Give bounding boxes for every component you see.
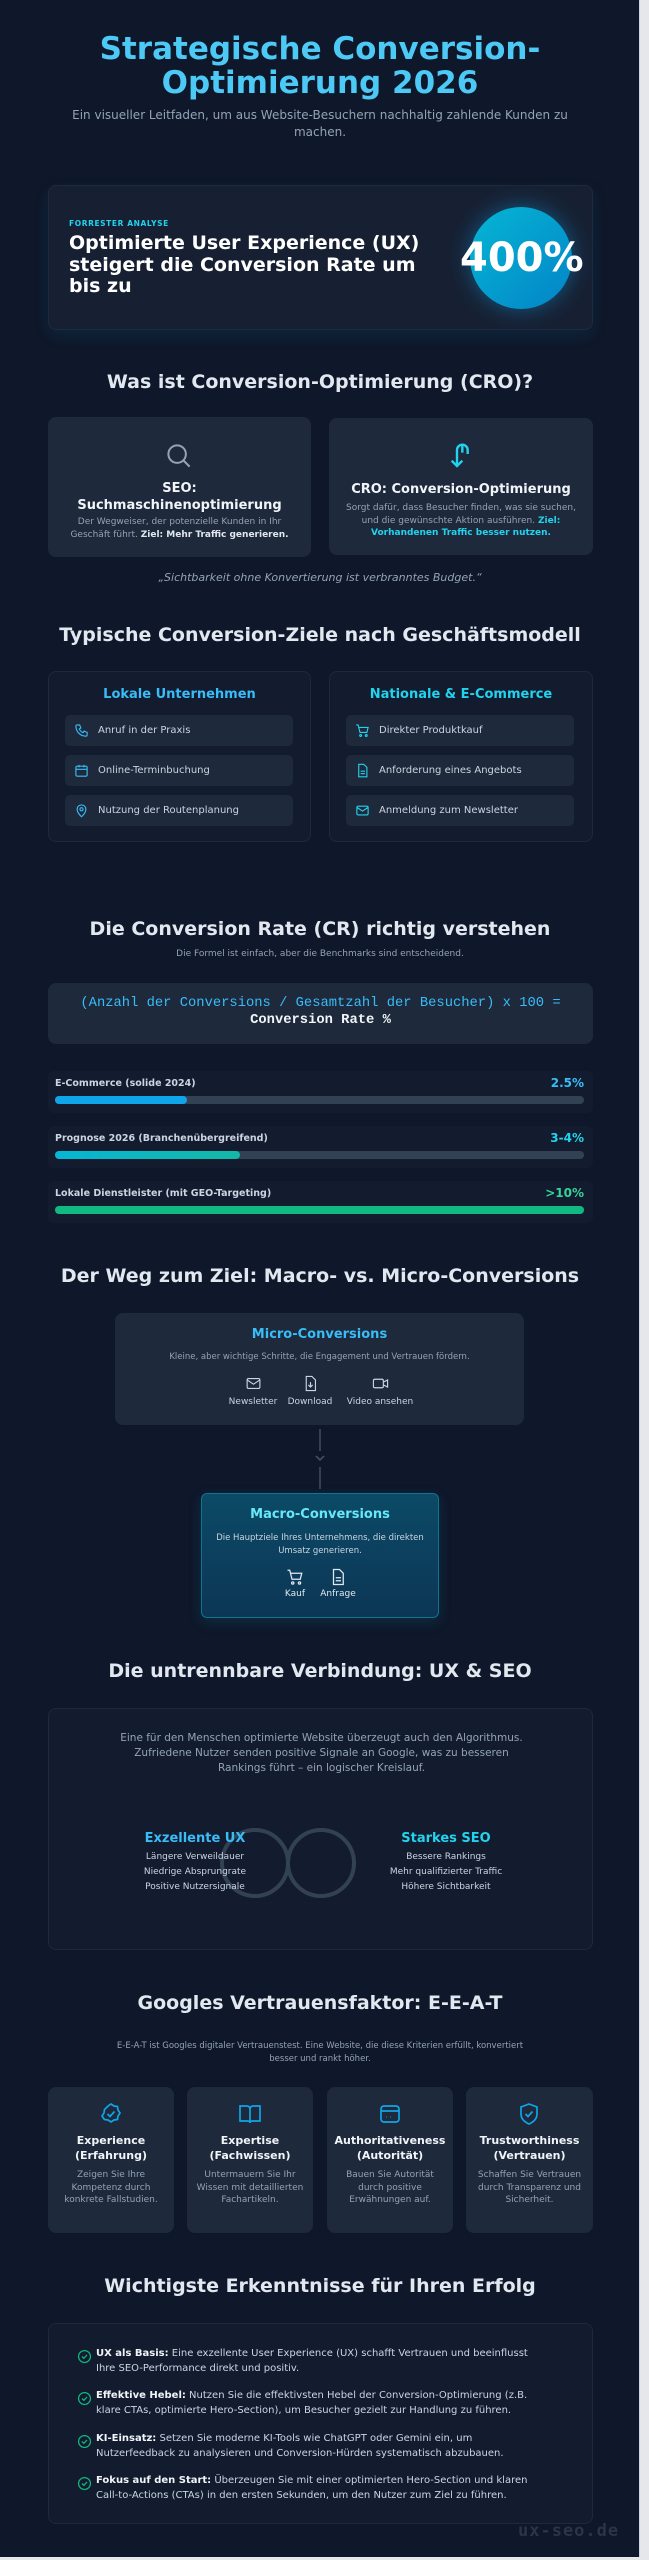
icon: download: Download [288,1397,332,1407]
icon: purchase: Kauf [285,1589,305,1599]
subtitle: Ein visueller Leitfaden, um aus Website-Besuchern nachhaltig zahlende Kunden zu machen. [72,108,568,139]
heading: conversion rate: Die Conversion Rate (CR) richtig verstehen [90,918,550,940]
bar: local providers: >10% [545,1186,584,1200]
panel: ecommerce [329,671,593,842]
bar: forecast 2026 [48,1126,593,1168]
panel: local businesses [48,671,311,842]
item: call: Anruf in der Praxis [98,725,190,736]
UX column: Niedrige Absprungrate [144,1867,246,1877]
macro desc: Die Hauptziele Ihres Unternehmens, die direkten Umsatz generieren. [216,1533,424,1556]
card: experience: Experience [77,2134,145,2147]
formula box [48,983,593,1044]
heading: E-E-A-T: Googles Vertrauensfaktor: E-E-A-T [138,1992,502,2014]
eyebrow label: FORRESTER ANALYSE [69,219,169,228]
icon: search [167,444,190,468]
eeat intro: E-E-A-T ist Googles digitaler Vertrauenstest. Eine Website, die diese Kriterien erfüllt, konvertiert besser und rankt höher. [117,2041,523,2064]
bar: e-commerce: 2.5% [551,1076,584,1090]
SEO column [390,1831,502,1892]
panel: micro conversions [115,1313,524,1425]
SEO column: Mehr qualifizierter Traffic [390,1867,502,1877]
item: booking: Online-Terminbuchung [98,765,210,776]
card: expertise [187,2087,313,2233]
item: quote [346,755,574,786]
takeaway 2: Effektive Hebel: Nutzen Sie die effektivsten Hebel der Conversion-Optimierung (z.B. klare CTAs, optimierte Hero-Section), um Besucher gezielt zur Handlung zu führen. [96,2390,527,2416]
heading: takeaways: Wichtigste Erkenntnisse für Ihren Erfolg [104,2275,536,2297]
subheading: Die Formel ist einfach, aber die Benchmarks sind entscheidend. [176,949,464,959]
panel: SEO [48,417,311,557]
formula box: (Anzahl der Conversions / Gesamtzahl der Besucher) x 100 = [80,996,561,1011]
bar: local providers [48,1181,593,1223]
quote: „Sichtbarkeit ohne Konvertierung ist verbranntes Budget.“ [158,571,482,584]
title [100,31,540,101]
bar: e-commerce [48,1071,593,1113]
SEO column: Bessere Rankings [406,1852,486,1862]
card: expertise: Expertise [221,2134,279,2147]
card: trustworthiness: Trustworthiness [480,2134,579,2147]
CRO desc: Sorgt dafür, dass Besucher finden, was sie suchen, und die gewünschte Aktion ausführen. Ziel: Vorhandenen Traffic besser nutzen. [346,503,576,538]
item: route [65,795,293,826]
card: trustworthiness [466,2087,593,2233]
SEO title: Suchmaschinenoptimierung [77,498,282,513]
heading: goals: Typische Conversion-Ziele nach Geschäftsmodell [59,624,581,646]
macro title: Macro-Conversions [250,1507,390,1522]
card: experience: Zeigen Sie Ihre Kompetenz durch konkrete Fallstudien. [64,2170,158,2205]
hero headline: Optimierte User Experience (UX) steigert die Conversion Rate um bis zu [69,232,419,297]
micro desc: Kleine, aber wichtige Schritte, die Engagement und Vertrauen fördern. [169,1352,470,1362]
card: authoritativeness [327,2087,453,2233]
card: experience: (Erfahrung) [75,2149,147,2162]
panel: UX & SEO cycle [48,1708,593,1950]
stat circle 400% [470,207,572,309]
micro title: Micro-Conversions [252,1327,387,1342]
icon: inquiry [320,1568,356,1599]
item: route: Nutzung der Routenplanung [98,805,239,816]
intro text: Eine für den Menschen optimierte Website überzeugt auch den Algorithmus. Zufriedene Nutzer senden positive Signale an Google, was zu besseren Rankings führt – ein logischer Kreislauf. [120,1732,523,1774]
item: newsletter: Anmeldung zum Newsletter [379,805,518,816]
hero card: forrester stat [48,185,593,330]
heading: CRO: Was ist Conversion-Optimierung (CRO)? [107,371,533,393]
panel title: Lokale Unternehmen [103,687,256,702]
panel: takeaways [48,2323,593,2524]
SEO title: SEO: [162,481,197,496]
title: Optimierung 2026 [162,65,478,101]
item: purchase: Direkter Produktkauf [379,725,483,736]
takeaway 3: KI-Einsatz: Setzen Sie moderne KI-Tools wie ChatGPT oder Gemini ein, um Nutzerfeedback zu analysieren und Conversion-Hürden systematisch abzubauen. [96,2433,504,2459]
SEO column: Höhere Sichtbarkeit [401,1882,491,1892]
icon: inquiry: Anfrage [320,1589,356,1599]
panel: macro conversions [201,1493,439,1618]
UX column: Positive Nutzersignale [145,1882,245,1892]
bar: forecast 2026: Prognose 2026 (Branchenübergreifend) [55,1133,268,1144]
bar: e-commerce: E-Commerce (solide 2024) [55,1078,196,1089]
icon: purchase [285,1570,306,1599]
takeaway 4: Fokus auf den Start: Überzeugen Sie mit einer optimierten Hero-Section und klaren Call-to-Actions (CTAs) in den ersten Sekunden, um den Nutzer zum Ziel zu führen. [96,2475,527,2501]
item: newsletter [346,795,574,826]
icon: video [346,1378,413,1407]
icon: download [288,1376,332,1407]
item: purchase [346,715,574,746]
heading: macro vs micro: Der Weg zum Ziel: Macro- vs. Micro-Conversions [61,1265,579,1287]
bar: forecast 2026: 3-4% [550,1131,584,1145]
panel: CRO [329,418,593,555]
card: authoritativeness: Authoritativeness [335,2134,445,2147]
card: experience [48,2087,174,2233]
UX column [144,1831,246,1892]
arrow: micro to macro [316,1429,324,1489]
item: quote: Anforderung eines Angebots [379,765,522,776]
card: trustworthiness: Schaffen Sie Vertrauen durch Transparenz und Sicherheit. [478,2170,581,2205]
watermark: ux-seo.de [518,2521,619,2541]
item: booking [65,755,293,786]
icon: video: Video ansehen [347,1397,413,1407]
icon: newsletter [229,1378,278,1407]
infinity circles [220,1828,356,1898]
SEO column: Starkes SEO [401,1831,491,1846]
card: expertise: (Fachwissen) [209,2149,291,2162]
icon: cursor arrow [450,444,469,468]
card: trustworthiness: (Vertrauen) [493,2149,566,2162]
CRO title: CRO: Conversion-Optimierung [351,482,571,497]
card: authoritativeness: (Autorität) [357,2149,423,2162]
UX column: Längere Verweildauer [146,1852,244,1862]
icon: newsletter: Newsletter [229,1397,277,1407]
bar: local providers: Lokale Dienstleister (mit GEO-Targeting) [55,1188,271,1199]
card: authoritativeness: Bauen Sie Autorität durch positive Erwähnungen auf. [346,2170,434,2205]
title: Strategische Conversion- [100,31,540,67]
item: call [65,715,293,746]
SEO title [77,481,282,513]
heading: UX & SEO: Die untrennbare Verbindung: UX & SEO [108,1660,532,1682]
UX column: Exzellente UX [145,1831,245,1846]
formula box: Conversion Rate % [250,1013,391,1028]
card: expertise: Untermauern Sie Ihr Wissen mit detaillierten Fachartikeln. [197,2170,303,2205]
panel title: Nationale & E-Commerce [370,687,552,702]
SEO desc: Der Wegweiser, der potenzielle Kunden in Ihr Geschäft führt. Ziel: Mehr Traffic generieren. [70,517,289,540]
takeaway 1: UX als Basis: Eine exzellente User Experience (UX) schafft Vertrauen und beeinflusst Ihre SEO-Performance direkt und positiv. [96,2348,528,2374]
stat circle 400%: 400% [460,235,584,281]
